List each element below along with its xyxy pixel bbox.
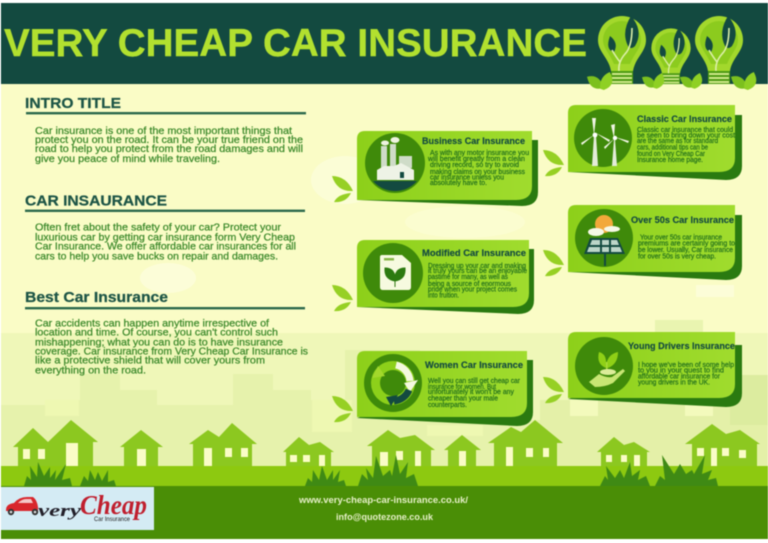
title: Classic Car Insurance xyxy=(637,114,732,125)
body: into fruition. xyxy=(428,292,459,300)
heading: car insaurance: CAR INSAURANCE xyxy=(25,192,167,210)
title: Over 50s Car Insurance xyxy=(631,215,734,226)
body: for over 50s is very cheap. xyxy=(638,253,716,260)
logo wordmark: very: very xyxy=(38,501,82,520)
body: be seen to bring down your cost xyxy=(637,133,735,140)
body: absolutely have to. xyxy=(430,180,487,187)
panel: over 50s car insurance xyxy=(543,205,742,280)
body: unfortunately it won't be any xyxy=(428,389,515,396)
icon: recycle arrows xyxy=(364,354,422,412)
body: affordable car insurance for xyxy=(638,374,721,381)
body xyxy=(638,362,734,387)
body: pastime for many, as well as xyxy=(428,274,509,281)
body: young drivers in the UK. xyxy=(638,380,710,387)
body: cheaper than your male xyxy=(428,396,498,402)
body: counterparts. xyxy=(428,402,467,409)
panel: young drivers insurance xyxy=(543,332,742,407)
body: car insurance unless you xyxy=(430,174,504,182)
body: intro xyxy=(35,125,303,165)
icon: fuel can xyxy=(363,243,423,303)
body xyxy=(428,263,527,300)
body: car insurance: Often fret about the safety of your car? Protect your xyxy=(35,222,282,234)
body xyxy=(428,378,521,409)
body: are the same as for standard xyxy=(637,138,718,145)
grass tufts xyxy=(24,455,718,486)
text block: intro xyxy=(25,95,306,165)
body: best car insurance: like a protective shield that will cover yours from xyxy=(35,354,265,366)
body: Well you can still get cheap car xyxy=(428,378,521,385)
body: premiums are certainly going to xyxy=(638,241,735,248)
body: car insurance xyxy=(35,222,296,262)
title: Young Drivers Insurance xyxy=(628,341,735,352)
heading: best car insurance: Best Car Insurance xyxy=(25,289,168,306)
body: As with any motor insurance you xyxy=(430,150,529,157)
body: making claims on your business xyxy=(430,169,526,176)
text block: best car insurance xyxy=(25,289,308,376)
title: VERY CHEAP CAR INSURANCE xyxy=(4,22,587,65)
skyline background xyxy=(1,320,768,466)
panel: classic car insurance xyxy=(543,105,742,180)
body: Dressing up your car and making xyxy=(428,263,526,270)
body: will benefit greatly from a clean xyxy=(427,156,525,163)
body: best car insurance: location and time. Of course, you can't control such xyxy=(35,326,278,338)
ground xyxy=(1,466,768,539)
body: it truly yours can be an enjoyable xyxy=(428,268,527,275)
body: to you in your quest to find xyxy=(638,368,724,375)
body: intro: Car insurance is one of the most important things that xyxy=(35,125,292,137)
body: intro: give you peace of mind while traveling. xyxy=(35,153,220,165)
icon: factory xyxy=(365,133,425,193)
body: best car insurance: everything on the road. xyxy=(35,364,146,376)
title: Modified Car Insurance xyxy=(422,248,526,259)
body: best car insurance: Car accidents can happen anytime irrespective of xyxy=(35,318,269,330)
body: car insurance: Car Insurance. We offer affordable car insurances for all xyxy=(35,240,296,252)
heading: intro title: INTRO TITLE xyxy=(25,95,121,112)
panel: modified car insurance xyxy=(332,240,534,314)
body: best car insurance: coverage. Car insurance from Very Cheap Car Insurance is xyxy=(35,346,308,358)
body: driving record, so try to avoid xyxy=(430,162,519,169)
body xyxy=(638,235,735,260)
icon: solar panel xyxy=(575,209,633,267)
body: be lower. Usually, Car insurance xyxy=(638,247,733,254)
title: Business Car Insurance xyxy=(422,136,525,147)
header band xyxy=(1,3,768,84)
body: best car insurance: mishappening; what you can do is to have insurance xyxy=(35,336,283,348)
body: insurance for women. But xyxy=(428,384,496,391)
logo wordmark: car insurance: Car Insurance xyxy=(94,517,131,523)
text block: car insurance xyxy=(25,192,305,262)
body: cars, additional tips can be xyxy=(637,145,708,152)
contact: email: info@quotezone.co.uk xyxy=(336,512,434,523)
body: car insurance: cars to help you save bucks on repair and damages. xyxy=(35,250,278,262)
body: intro: road to help you protect from the road damages and will xyxy=(35,143,303,155)
body: I hope we've been of some help xyxy=(638,362,734,369)
houses row xyxy=(13,420,760,466)
body: being a source of enormous xyxy=(428,281,512,288)
title: Women Car Insurance xyxy=(425,360,523,371)
body: car insurance: luxurious car by getting car insurance form Very Cheap xyxy=(35,232,295,244)
body xyxy=(427,150,529,187)
body xyxy=(637,127,735,164)
logo xyxy=(1,487,154,530)
body: pride when your project comes xyxy=(428,286,518,294)
body: Insurance home page. xyxy=(637,157,703,164)
contact: website: www.very-cheap-car-insurance.co.uk/ xyxy=(298,495,468,506)
body: Classic car insurance that could xyxy=(637,127,733,134)
panel: women car insurance xyxy=(332,351,533,426)
body: intro: protect you on the road. It can be your true friend on the xyxy=(35,134,303,146)
logo wordmark: cheap: Cheap xyxy=(80,490,147,520)
icon: wind turbines xyxy=(574,109,632,167)
icon: light bulbs with leaves xyxy=(587,16,756,90)
panel: business car insurance xyxy=(332,131,538,206)
body: best car insurance xyxy=(35,318,308,376)
icon: hand with sprout xyxy=(575,337,633,395)
icon: red car xyxy=(6,497,38,515)
body: Your over 50s car insurance xyxy=(640,235,722,242)
body: found on Very Cheap Car xyxy=(637,151,706,158)
